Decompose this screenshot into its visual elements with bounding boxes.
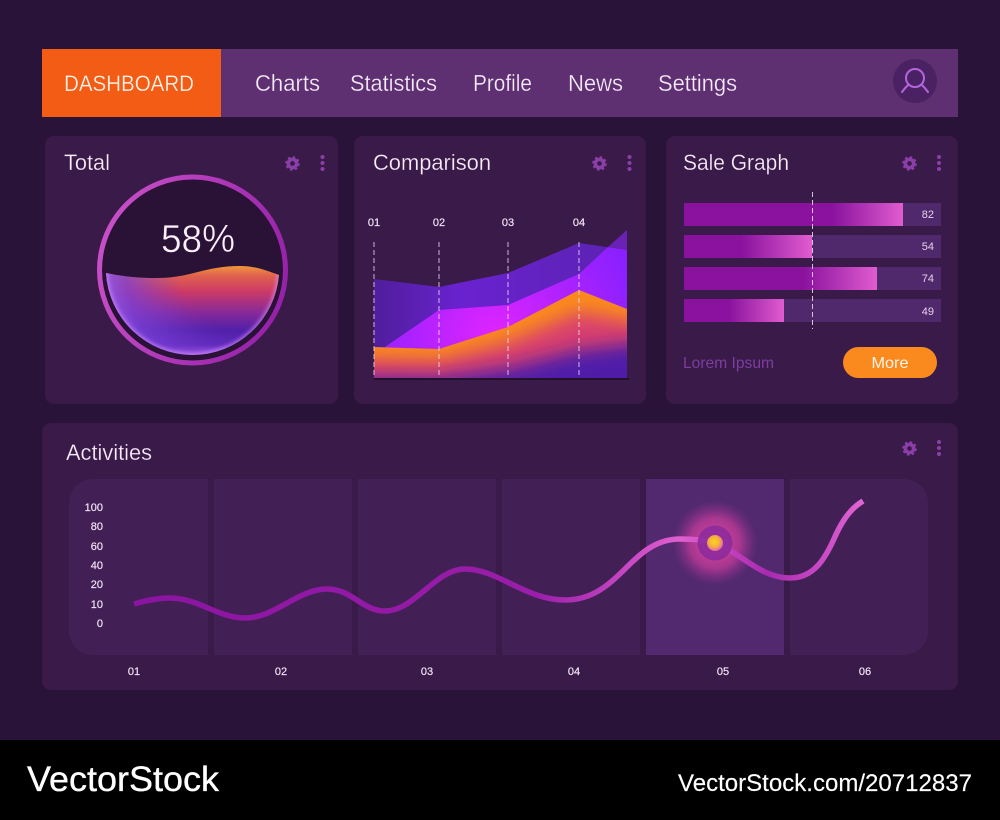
axis labels: 01 xyxy=(368,217,380,229)
bar values: 54 xyxy=(922,241,934,253)
y axis labels: 10 xyxy=(91,599,103,611)
dashed guides xyxy=(374,242,579,378)
menu items: Charts xyxy=(255,70,320,96)
panel: sale graph xyxy=(666,136,958,404)
y axis labels: 20 xyxy=(91,579,103,591)
footer watermark bar xyxy=(0,740,1000,820)
y axis labels: 100 xyxy=(85,502,103,514)
panel: total xyxy=(45,136,338,404)
x axis labels: 06 xyxy=(859,666,871,678)
brand name: VectorStock xyxy=(27,760,220,799)
y axis labels: 0 xyxy=(97,618,103,630)
x axis labels: 05 xyxy=(717,666,729,678)
glow halo xyxy=(673,501,757,585)
bar values xyxy=(922,209,934,318)
menu items xyxy=(255,70,737,96)
area chart xyxy=(368,218,629,380)
caption: Lorem Ipsum xyxy=(683,355,774,372)
icon: more dots xyxy=(320,155,324,171)
heading: activities: Activities xyxy=(66,440,152,465)
panel: activities xyxy=(42,423,958,690)
icon: settings gear xyxy=(903,442,916,455)
dashboard tab: DASHBOARD xyxy=(64,71,194,96)
axis labels: 04 xyxy=(573,217,585,229)
trend curve xyxy=(134,501,863,618)
menu items: News xyxy=(568,70,623,96)
y axis labels: 80 xyxy=(91,521,103,533)
navigation bar xyxy=(42,49,958,117)
gauge value: 58% xyxy=(161,218,235,261)
dashboard tab xyxy=(42,49,221,117)
menu items: Settings xyxy=(658,70,737,96)
x axis labels xyxy=(128,666,871,678)
panel: comparison xyxy=(354,136,646,404)
axis labels xyxy=(368,217,585,229)
axis labels: 03 xyxy=(502,217,514,229)
icon: user avatar xyxy=(893,59,937,103)
icon: more dots xyxy=(628,155,632,171)
bar values: 74 xyxy=(922,273,934,285)
liquid fill xyxy=(106,266,279,355)
x axis labels: 01 xyxy=(128,666,140,678)
more button: More xyxy=(872,355,909,372)
icon: more dots xyxy=(937,440,941,456)
menu items: Statistics xyxy=(350,70,437,96)
y axis labels: 40 xyxy=(91,560,103,572)
x axis labels: 02 xyxy=(275,666,287,678)
icon: more dots xyxy=(937,155,941,171)
bar values: 82 xyxy=(922,209,934,221)
gauge: 58 percent xyxy=(100,177,286,363)
heading: sale graph: Sale Graph xyxy=(683,150,789,175)
heading: total: Total xyxy=(64,150,110,175)
menu items: Profile xyxy=(473,70,532,96)
bar values: 49 xyxy=(922,306,934,318)
y axis labels: 60 xyxy=(91,541,103,553)
line chart xyxy=(69,479,928,678)
x axis labels: 03 xyxy=(421,666,433,678)
image reference: VectorStock.com/20712837 xyxy=(678,770,972,797)
y axis labels xyxy=(85,502,103,630)
icon: settings gear xyxy=(286,157,299,170)
x axis labels: 04 xyxy=(568,666,580,678)
more button xyxy=(843,347,937,378)
icon: settings gear xyxy=(903,157,916,170)
heading: comparison: Comparison xyxy=(373,150,491,175)
icon: settings gear xyxy=(593,157,606,170)
highlighted point xyxy=(698,526,732,560)
horizontal bar chart xyxy=(684,192,941,329)
axis labels: 02 xyxy=(433,217,445,229)
